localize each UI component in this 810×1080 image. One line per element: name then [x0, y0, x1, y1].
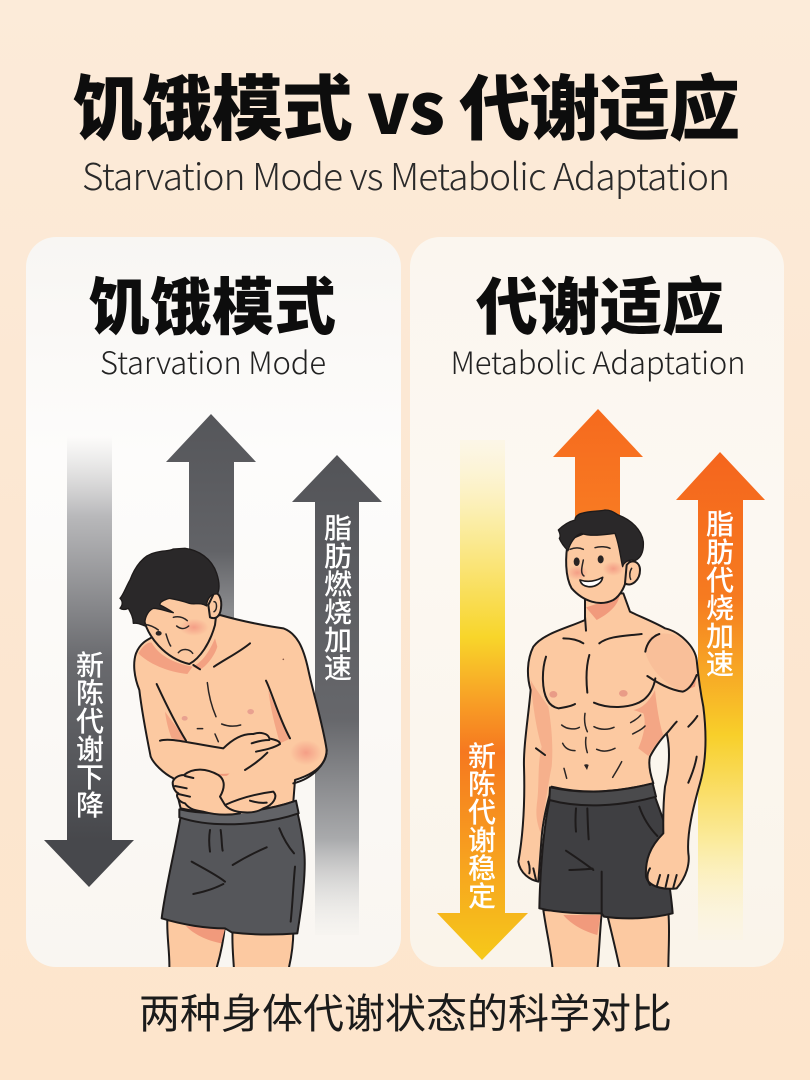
arrow label: metabolism stable: 陈 [468, 763, 496, 803]
arrow label: fat burning: 燃 [324, 563, 352, 603]
arrow label: fat burning: 速 [324, 647, 352, 687]
arrow label: fat burning: 代 [706, 559, 734, 599]
title: 饥饿模式 vs 代谢适应 [72, 53, 740, 155]
arrow label: metabolism stable: 定 [468, 875, 496, 915]
arrow label: metabolism stable: 稳 [468, 847, 496, 887]
panel subtitle: starvation: Starvation Mode [100, 338, 326, 383]
illustration: hunched hungry man [120, 548, 327, 970]
arrow label: metabolism down: 代 [76, 700, 104, 740]
bottom caption: 两种身体代谢状态的科学对比 [139, 980, 672, 1040]
arrow: fat burning up, middle [166, 414, 256, 620]
arrow label: fat burning: 加 [324, 619, 352, 659]
arrow label: metabolism stable: 新 [468, 735, 496, 775]
panel: metabolic adaptation [410, 237, 784, 970]
panel: starvation mode [26, 237, 401, 970]
arrow label: fat burning: 脂 [706, 503, 734, 543]
arrow label: fat burning: 脂 [324, 507, 352, 547]
illustration: smiling muscular man [518, 510, 706, 970]
arrow: fat burning up, right [676, 452, 765, 940]
arrow label: metabolism stable: 谢 [468, 819, 496, 859]
subtitle: Starvation Mode vs Metabolic Adaptation [82, 147, 730, 201]
arrow label: fat burning: 烧 [324, 591, 352, 631]
panel heading: adaptation: 代谢适应 [476, 257, 724, 347]
arrow: metabolism stable [437, 440, 528, 960]
arrow: fat burning up, right [292, 455, 382, 935]
arrow label: fat burning: 加 [706, 615, 734, 655]
arrow: metabolism down [44, 436, 134, 887]
panel heading: starvation: 饥饿模式 [88, 257, 336, 347]
arrow label: metabolism down: 降 [76, 784, 104, 824]
arrow label: fat burning: 速 [706, 643, 734, 683]
arrow label: metabolism down: 陈 [76, 672, 104, 712]
arrow label: fat burning: 肪 [324, 535, 352, 575]
arrow label: metabolism stable: 代 [468, 791, 496, 831]
arrow label: fat burning: 烧 [706, 587, 734, 627]
arrow label: fat burning: 肪 [706, 531, 734, 571]
arrow label: metabolism down: 谢 [76, 728, 104, 768]
panel subtitle: adaptation: Metabolic Adaptation [450, 338, 746, 383]
arrow label: metabolism down: 新 [76, 644, 104, 684]
arrow: fat burning up, middle [553, 409, 643, 560]
arrow label: metabolism down: 下 [76, 756, 104, 796]
